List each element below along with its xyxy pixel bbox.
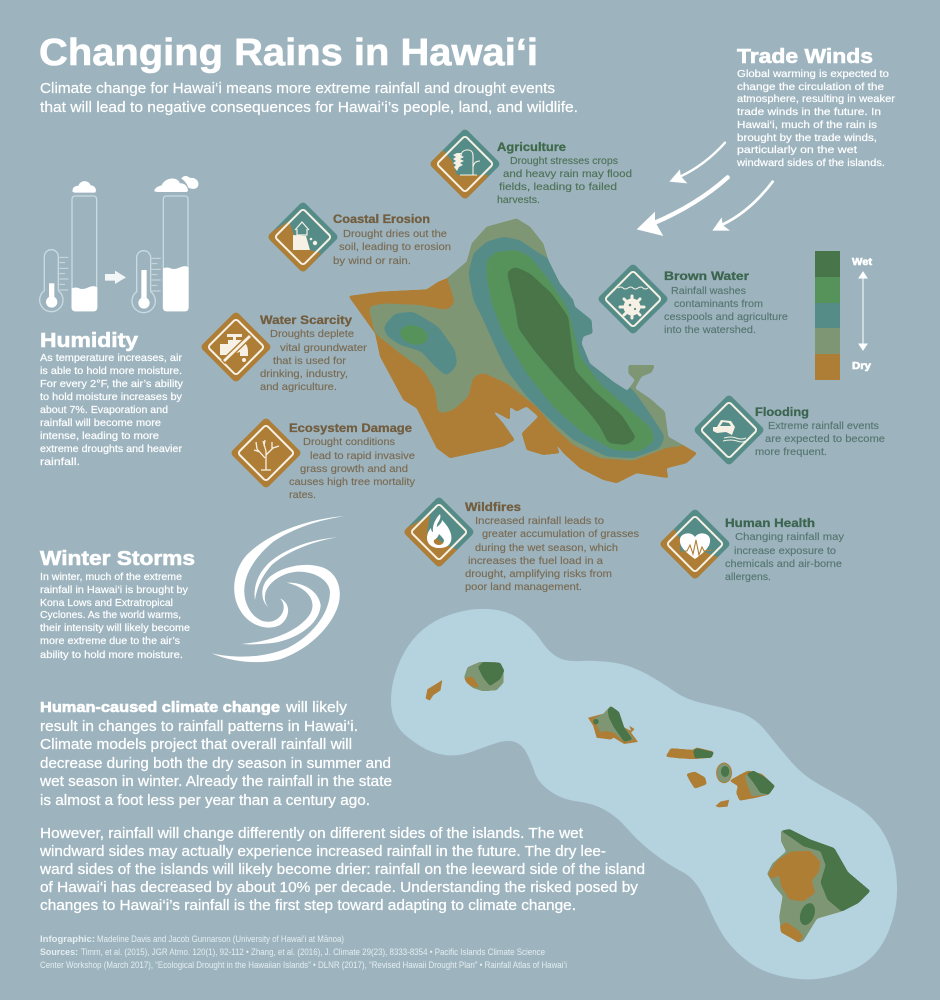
panel: flooding bbox=[693, 394, 885, 466]
text: humidity body: is able to hold more moisture. bbox=[40, 365, 182, 377]
text: humidity body: about 7%. Evaporation and bbox=[40, 404, 168, 416]
text: human health body: Changing rainfall may bbox=[735, 531, 845, 543]
text: human health body: chemicals and air-borne bbox=[725, 558, 842, 570]
text: ecosystem damage body bbox=[289, 436, 416, 501]
island: Kahoolawe bbox=[715, 800, 729, 807]
text: brown water body: Rainfall washes bbox=[671, 285, 746, 297]
text: trade winds body bbox=[736, 68, 896, 169]
text: winter storms body: Cyclones. As the world warms, bbox=[40, 609, 181, 621]
text: trade winds body: Global warming is expected to bbox=[737, 68, 889, 80]
text: credits and sources bbox=[40, 934, 567, 970]
green zone bbox=[487, 250, 655, 452]
icon: left cloud bbox=[73, 181, 96, 193]
icon: right clouds bbox=[154, 176, 199, 192]
text: ecosystem damage body: lead to rapid invasive bbox=[310, 450, 415, 462]
text: human-caused climate change paragraph bbox=[39, 700, 392, 809]
icon: coastal erosion bbox=[268, 202, 338, 272]
text: water scarcity body: drinking, industry, bbox=[260, 368, 348, 380]
text: windward and leeward paragraph: changes to Hawai‘i’s rainfall is the first step toward adapting to climate change. bbox=[40, 898, 576, 914]
icon: left thermometer bbox=[40, 250, 68, 312]
text: trade winds body: trade winds in the future. In bbox=[737, 106, 881, 118]
text: credits and sources: Infographic: bbox=[40, 934, 95, 944]
island: Oahu bbox=[588, 706, 638, 744]
text: ecosystem damage body: causes high tree mortality bbox=[289, 476, 416, 488]
icon: storm swirl bbox=[212, 516, 345, 662]
text: winter storms body: Kona Lows and Extratropical bbox=[40, 597, 173, 609]
text: winter storms body bbox=[40, 571, 190, 661]
panel: humidity bbox=[40, 176, 199, 468]
text: human-caused climate change paragraph: decrease during both the dry season in summer and bbox=[40, 756, 391, 772]
icon: right water level bbox=[163, 266, 189, 311]
icon: ecosystem damage bbox=[230, 417, 302, 489]
legend arrow bbox=[859, 272, 867, 350]
panel: brown water bbox=[597, 263, 788, 336]
text: coastal erosion body bbox=[333, 228, 451, 267]
island: Maui bbox=[716, 763, 775, 801]
text: flooding body: Extreme rainfall events bbox=[768, 420, 879, 432]
text: ecosystem damage body: rates. bbox=[289, 489, 316, 501]
text: human health body bbox=[725, 531, 845, 583]
map: Oahu rainfall map bbox=[350, 218, 696, 483]
text: human-caused climate change paragraph: result in changes to rainfall patterns in Hawai‘i. bbox=[40, 719, 358, 735]
icon: right thermometer bbox=[132, 251, 161, 313]
text: windward and leeward paragraph: of Hawai‘i has decreased by about 10% per decade. Understanding the risked posed by bbox=[40, 880, 639, 896]
text: humidity body: extreme droughts and heavier bbox=[40, 443, 183, 455]
text: agriculture body: harvests. bbox=[497, 194, 540, 206]
text: credits and sources: Sources: bbox=[40, 947, 78, 957]
text: wildfires body: drought, amplifying risks from bbox=[465, 568, 612, 580]
text: trade winds body: atmosphere, resulting in weaker bbox=[737, 93, 896, 105]
text: wildfires body: Increased rainfall leads to bbox=[475, 515, 604, 527]
heading: humidity: Humidity bbox=[40, 330, 139, 352]
text: human-caused climate change paragraph: is almost a foot less per year than a century ago. bbox=[40, 793, 370, 809]
text: humidity body: As temperature increases, air bbox=[40, 352, 183, 364]
panel: trade winds bbox=[736, 46, 896, 169]
text: ecosystem damage body: grass growth and and bbox=[300, 463, 408, 475]
heading: agriculture: Agriculture bbox=[497, 140, 566, 154]
island: Niihau bbox=[426, 681, 442, 700]
text: windward and leeward paragraph bbox=[39, 826, 645, 914]
text: wildfires body: greater accumulation of grasses bbox=[482, 528, 639, 540]
icon: flooding bbox=[693, 394, 765, 466]
text: coastal erosion body: Drought dries out the bbox=[343, 228, 447, 240]
icon: trade wind arrows bbox=[637, 143, 773, 236]
heading: brown water: Brown Water bbox=[664, 269, 749, 283]
text: agriculture body: fields, leading to failed bbox=[499, 181, 617, 193]
text: flooding body: are expected to become bbox=[765, 433, 885, 445]
island: Kauai bbox=[464, 662, 504, 691]
heading: trade winds: Trade Winds bbox=[737, 46, 873, 68]
text: windward and leeward paragraph: ward sides of the islands will likely become drier: rainfall on the leeward side of the island bbox=[39, 862, 645, 878]
text: winter storms body: more extreme due to the air’s bbox=[40, 635, 180, 647]
island: Hawaii bbox=[767, 829, 870, 943]
olive zone bbox=[368, 200, 690, 461]
panel: ecosystem damage bbox=[230, 417, 416, 501]
text: humidity body bbox=[40, 352, 184, 468]
text: humidity body: For every 2°F, the air’s ability bbox=[40, 378, 184, 390]
text: winter storms body: In winter, much of the extreme bbox=[40, 571, 182, 583]
icon: wildfires bbox=[404, 498, 474, 566]
text: coastal erosion body: soil, leading to erosion bbox=[339, 241, 451, 253]
panel: human health bbox=[660, 510, 844, 582]
text: human-caused climate change paragraph: Climate models project that overall rainfall will bbox=[40, 737, 352, 753]
icon: agriculture bbox=[430, 130, 500, 198]
text: coastal erosion body: by wind or rain. bbox=[333, 255, 411, 267]
subtitle text block: Climate change for Hawai‘i means more extreme rainfall and drought events bbox=[40, 81, 555, 97]
text: trade winds body: particularly on the wet bbox=[737, 144, 857, 156]
text: water scarcity body: that is used for bbox=[273, 355, 347, 367]
icon: water scarcity bbox=[200, 311, 272, 383]
text: wildfires body: increases the fuel load in a bbox=[468, 555, 603, 567]
text: humidity body: to hold moisture increases by bbox=[40, 391, 183, 403]
text: winter storms body: rainfall in Hawai‘i is brought by bbox=[40, 584, 189, 596]
text: wildfires body bbox=[465, 515, 639, 593]
heading: water scarcity: Water Scarcity bbox=[260, 313, 352, 327]
panel: coastal erosion bbox=[268, 202, 450, 272]
panel: water scarcity bbox=[200, 311, 368, 393]
icon: thermometers and water columns bbox=[40, 176, 199, 313]
western teal zone bbox=[383, 312, 457, 377]
teal zone bbox=[468, 237, 665, 458]
ocean blob bbox=[391, 609, 897, 979]
heading: flooding: Flooding bbox=[755, 405, 809, 419]
icon: brown water bbox=[597, 263, 669, 335]
island: Lanai bbox=[686, 772, 707, 789]
text: flooding body: more frequent. bbox=[755, 446, 827, 458]
icon: left water level bbox=[72, 286, 97, 311]
panel: agriculture bbox=[430, 130, 632, 204]
text: trade winds body: Hawai‘i, much of the rain is bbox=[737, 119, 877, 131]
map: Hawaiian island chain bbox=[391, 609, 897, 979]
text: brown water body: contaminants from bbox=[674, 298, 763, 310]
text: credits and sources: Madeline Davis and Jacob Gunnarson (University of Hawai‘i at Mānoa) bbox=[97, 934, 344, 944]
heading: human health: Human Health bbox=[725, 516, 815, 530]
subtitle text block: that will lead to negative consequences for Hawai‘i’s people, land, and wildlife. bbox=[40, 100, 578, 116]
text: human-caused climate change paragraph: will likely bbox=[285, 700, 348, 716]
text: humidity body: rainfall. bbox=[40, 456, 80, 468]
text: water scarcity body bbox=[260, 328, 368, 393]
title: Changing Rains in Hawai‘i bbox=[39, 32, 538, 74]
subtitle text block bbox=[40, 81, 578, 116]
text: flooding body bbox=[755, 420, 885, 458]
text: human-caused climate change paragraph: wet season in winter. Already the rainfall in the state bbox=[39, 774, 392, 790]
text: brown water body: into the watershed. bbox=[664, 324, 756, 336]
text: water scarcity body: vital groundwater bbox=[280, 342, 368, 354]
text: wildfires body: during the wet season, which bbox=[475, 542, 618, 554]
text: credits and sources: Center Workshop (March 2017), “Ecological Drought in the Hawaiian Islands” • DLNR (2017), “Revised Hawaii Drought Plan” • Rainfall Atlas of Hawai‘i bbox=[40, 960, 567, 970]
text: trade winds body: brought by the trade winds, bbox=[737, 132, 877, 144]
text: brown water body: cesspools and agriculture bbox=[664, 311, 788, 323]
icon: human health bbox=[660, 510, 730, 578]
heading: coastal erosion: Coastal Erosion bbox=[333, 212, 430, 226]
arrow: warming bbox=[105, 271, 126, 284]
text: human-caused climate change paragraph: Human-caused climate change bbox=[40, 700, 280, 716]
legend label: dry: Dry bbox=[852, 360, 871, 372]
heading: winter storms: Winter Storms bbox=[40, 548, 195, 570]
panel: wildfires bbox=[399, 492, 639, 593]
text: winter storms body: their intensity will likely become bbox=[40, 622, 190, 634]
text: humidity body: rainfall will become more bbox=[40, 417, 161, 429]
panel: winter storms bbox=[40, 516, 345, 662]
heading: wildfires: Wildfires bbox=[465, 500, 521, 514]
legend label: wet: Wet bbox=[852, 256, 873, 268]
text: human health body: allergens. bbox=[725, 571, 771, 583]
text: credits and sources: Timm, et al. (2015), JGR Atmo. 120(1), 92-112 • Zhang, et al. (2016), J. Climate 29(23), 8333-8354 • Pacific Islands Climate Science bbox=[81, 947, 545, 957]
legend colour bands bbox=[815, 251, 840, 380]
text: windward and leeward paragraph: windward sides may actually experience increased rainfall in the future. The dry lee- bbox=[39, 844, 606, 860]
western green zone bbox=[400, 325, 428, 345]
text: brown water body bbox=[664, 285, 788, 336]
wettest zone bbox=[507, 267, 637, 445]
text: winter storms body: ability to hold more moisture. bbox=[40, 649, 183, 661]
text: trade winds body: windward sides of the islands. bbox=[736, 157, 885, 169]
text: windward and leeward paragraph: However, rainfall will change differently on different sides of the islands. The wet bbox=[40, 826, 583, 842]
island: Molokai bbox=[666, 747, 714, 759]
legend bbox=[815, 251, 873, 380]
text: agriculture body: Drought stresses crops bbox=[510, 155, 618, 167]
text: water scarcity body: Droughts deplete bbox=[270, 328, 354, 340]
text: human health body: increase exposure to bbox=[734, 545, 836, 557]
text: humidity body: intense, leading to more bbox=[40, 430, 159, 442]
text: agriculture body: and heavy rain may flood bbox=[503, 168, 632, 180]
text: trade winds body: change the circulation of the bbox=[737, 81, 884, 93]
text: water scarcity body: and agriculture. bbox=[260, 381, 337, 393]
text: agriculture body bbox=[497, 155, 632, 206]
dry zone bbox=[350, 278, 696, 483]
heading: ecosystem damage: Ecosystem Damage bbox=[289, 421, 412, 435]
text: ecosystem damage body: Drought conditions bbox=[303, 436, 395, 448]
text: wildfires body: poor land management. bbox=[465, 581, 582, 593]
